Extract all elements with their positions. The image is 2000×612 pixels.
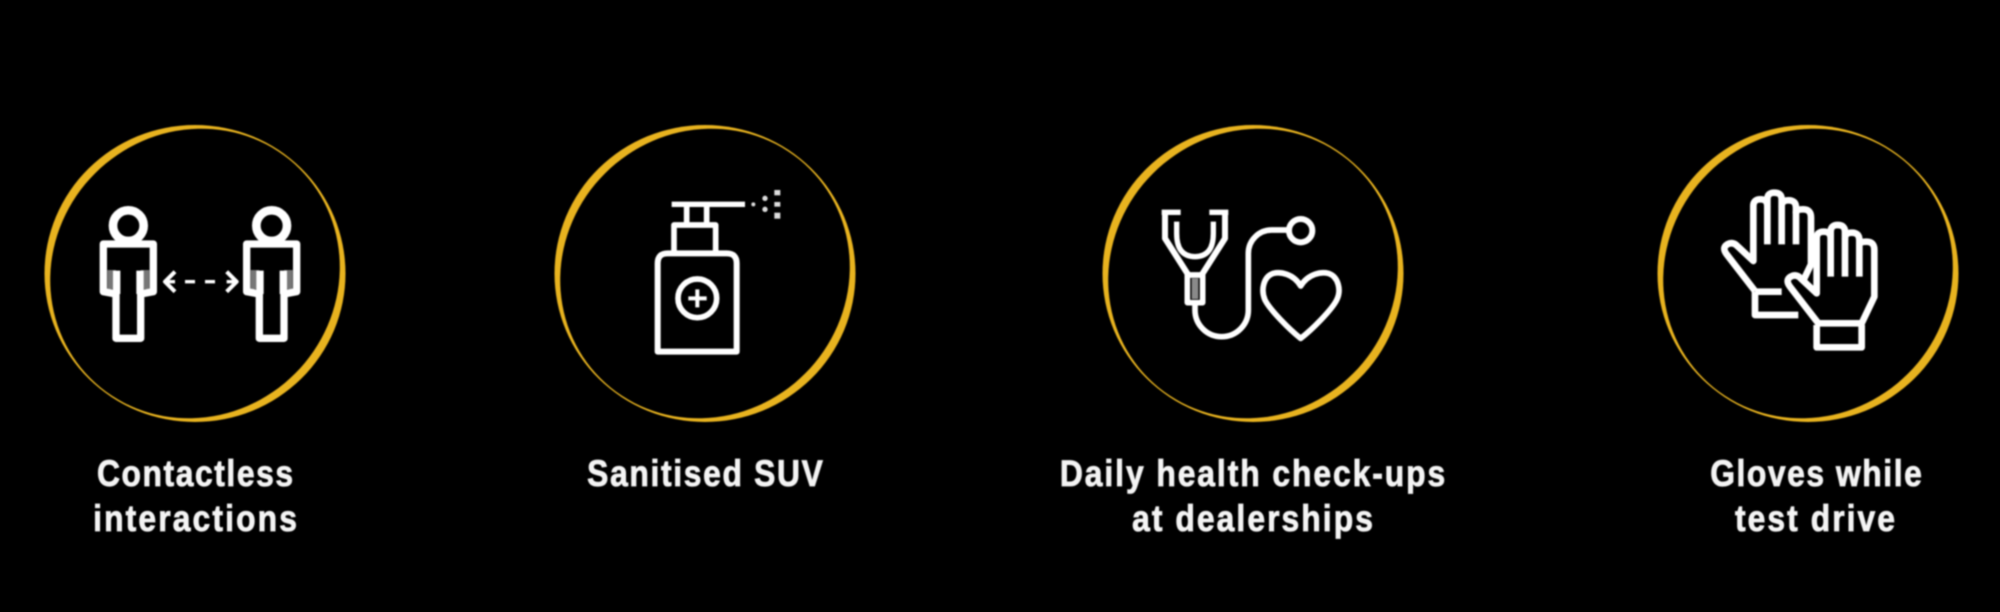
label: Gloves while test drive: Gloves while	[1710, 454, 1922, 495]
label: Contactless interactions: interactions	[93, 499, 297, 540]
label: Contactless interactions: Contactless	[97, 454, 293, 495]
gold ring	[0, 69, 400, 478]
label: Daily health check-ups at dealerships	[1060, 454, 1445, 540]
icon: sanitiser pump bottle	[658, 190, 780, 352]
icon: two people with distance arrow	[103, 210, 297, 338]
icon: pair of gloves	[1724, 193, 1874, 347]
label: Gloves while test drive	[1710, 454, 1922, 540]
panel: sanitised SUV	[500, 69, 910, 495]
gold ring	[1048, 69, 1458, 478]
label: Sanitised SUV: Sanitised SUV	[587, 454, 823, 495]
label: Contactless interactions	[93, 454, 297, 540]
panel: gloves while test drive	[1603, 69, 2000, 540]
panel: contactless interactions	[0, 69, 400, 540]
panel: daily health check-ups	[1048, 69, 1458, 540]
label: Daily health check-ups at dealerships: at dealerships	[1132, 499, 1373, 540]
label: Daily health check-ups at dealerships: Daily health check-ups	[1060, 454, 1445, 495]
label: Gloves while test drive: test drive	[1735, 499, 1895, 540]
icon: stethoscope and heart	[1162, 212, 1339, 338]
gold ring	[500, 69, 910, 478]
gold ring	[1603, 69, 2000, 478]
